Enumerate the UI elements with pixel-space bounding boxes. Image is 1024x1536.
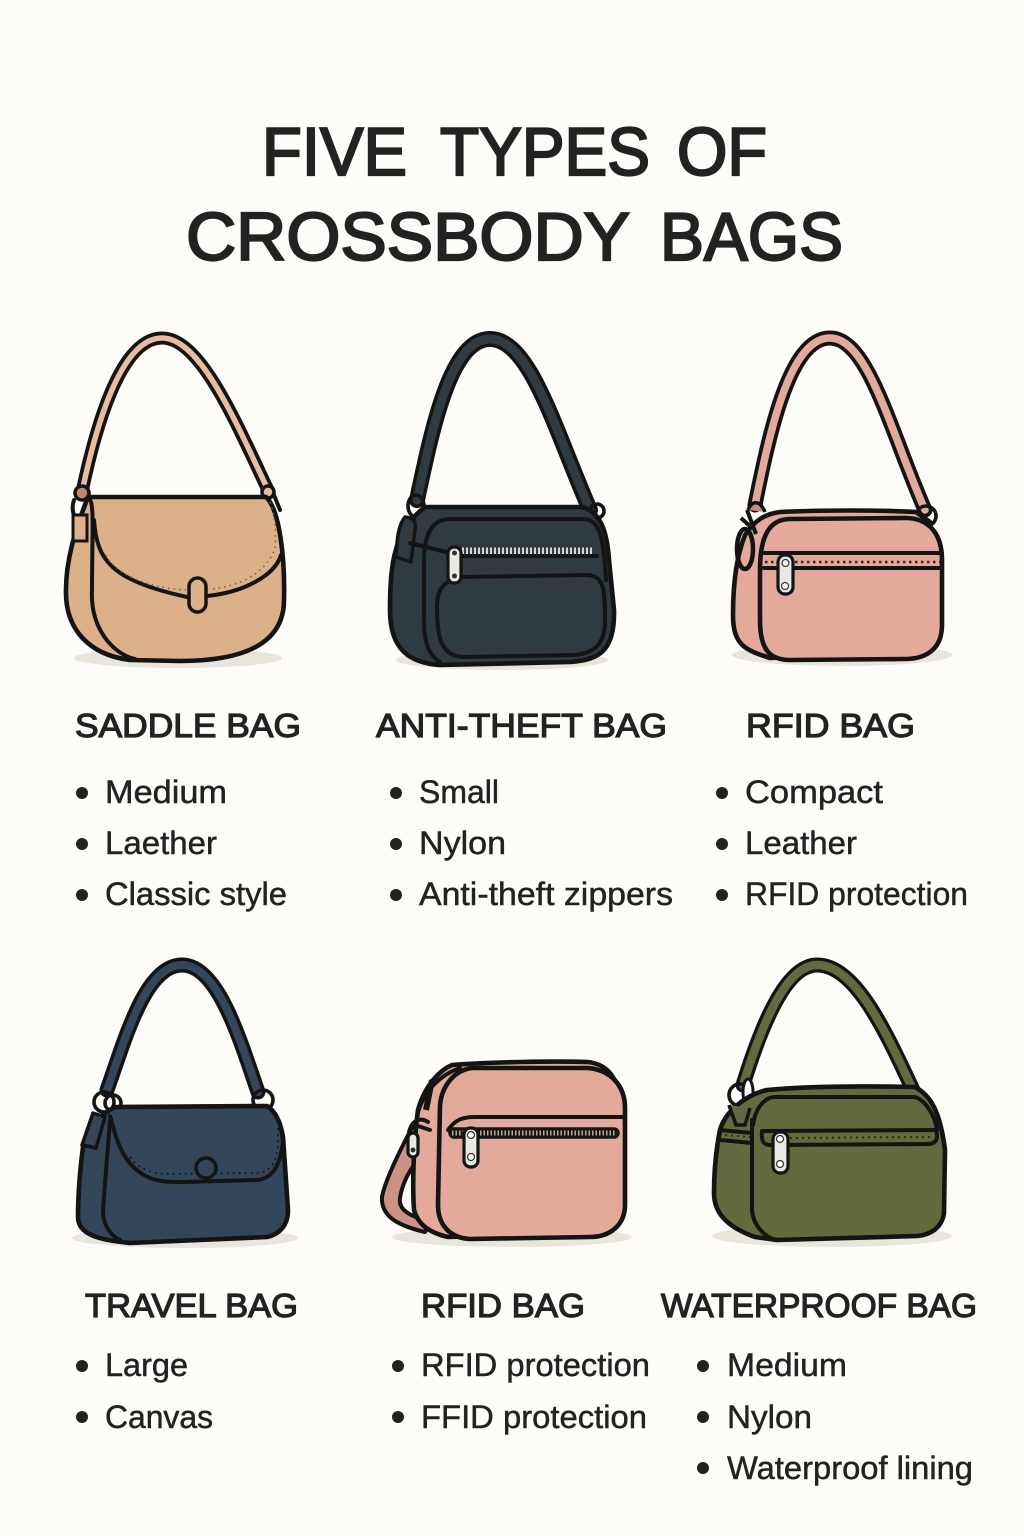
list: RFID protection features bbox=[392, 1347, 650, 1435]
list: waterproof features: Nylon bbox=[727, 1399, 812, 1435]
panel: travel bag bbox=[72, 965, 298, 1435]
icon: pink zip-front RFID bag bbox=[382, 1062, 632, 1247]
list: RFID features bbox=[716, 774, 968, 912]
list: RFID protection features: RFID protection bbox=[421, 1347, 650, 1383]
list: RFID protection features: FFID protection bbox=[421, 1399, 647, 1435]
heading: travel bag: TRAVEL BAG bbox=[85, 1287, 298, 1324]
title: CROSSBODY bbox=[186, 199, 630, 275]
panel: saddle bag bbox=[66, 338, 301, 912]
list: RFID features: Compact bbox=[745, 774, 883, 810]
list: travel features bbox=[76, 1347, 213, 1435]
list: anti-theft features bbox=[390, 774, 673, 912]
panel: RFID bag, zip front bbox=[382, 1062, 650, 1435]
heading: waterproof bag: WATERPROOF BAG bbox=[661, 1287, 977, 1324]
icon: anti-theft bag bbox=[390, 339, 614, 670]
heading: anti-theft bag: ANTI-THEFT BAG bbox=[376, 707, 667, 744]
list: anti-theft features: Small bbox=[419, 774, 499, 810]
title: OF bbox=[677, 114, 767, 190]
panel: waterproof bag bbox=[661, 965, 977, 1486]
panel: anti-theft bag bbox=[376, 339, 673, 912]
list: waterproof features bbox=[697, 1347, 973, 1486]
list: RFID features: RFID protection bbox=[745, 876, 968, 912]
list: saddle bag features: Medium bbox=[105, 774, 227, 810]
title bbox=[186, 114, 843, 275]
title: TYPES bbox=[440, 114, 650, 190]
list: anti-theft features: Anti-theft zippers bbox=[419, 876, 673, 912]
list: saddle bag features bbox=[76, 774, 287, 912]
heading: RFID bag: RFID BAG bbox=[421, 1287, 585, 1324]
list: waterproof features: Medium bbox=[727, 1347, 847, 1383]
heading: saddle bag: SADDLE BAG bbox=[75, 707, 301, 744]
list: travel features: Canvas bbox=[105, 1399, 213, 1435]
list: waterproof features: Waterproof lining bbox=[727, 1450, 973, 1486]
list: saddle bag features: Laether bbox=[105, 825, 217, 861]
list: RFID features: Leather bbox=[745, 825, 857, 861]
icon: travel bag bbox=[72, 965, 298, 1248]
list: anti-theft features: Nylon bbox=[419, 825, 506, 861]
panel: RFID bag, compact bbox=[716, 338, 968, 912]
icon: pink RFID bag bbox=[732, 338, 952, 666]
title: BAGS bbox=[660, 199, 843, 275]
list: saddle bag features: Classic style bbox=[105, 876, 287, 912]
title: FIVE bbox=[262, 114, 407, 190]
heading: RFID bag: RFID BAG bbox=[746, 707, 915, 744]
icon: saddle bag bbox=[66, 338, 284, 668]
list: travel features: Large bbox=[105, 1347, 188, 1383]
icon: waterproof bag bbox=[712, 965, 952, 1247]
